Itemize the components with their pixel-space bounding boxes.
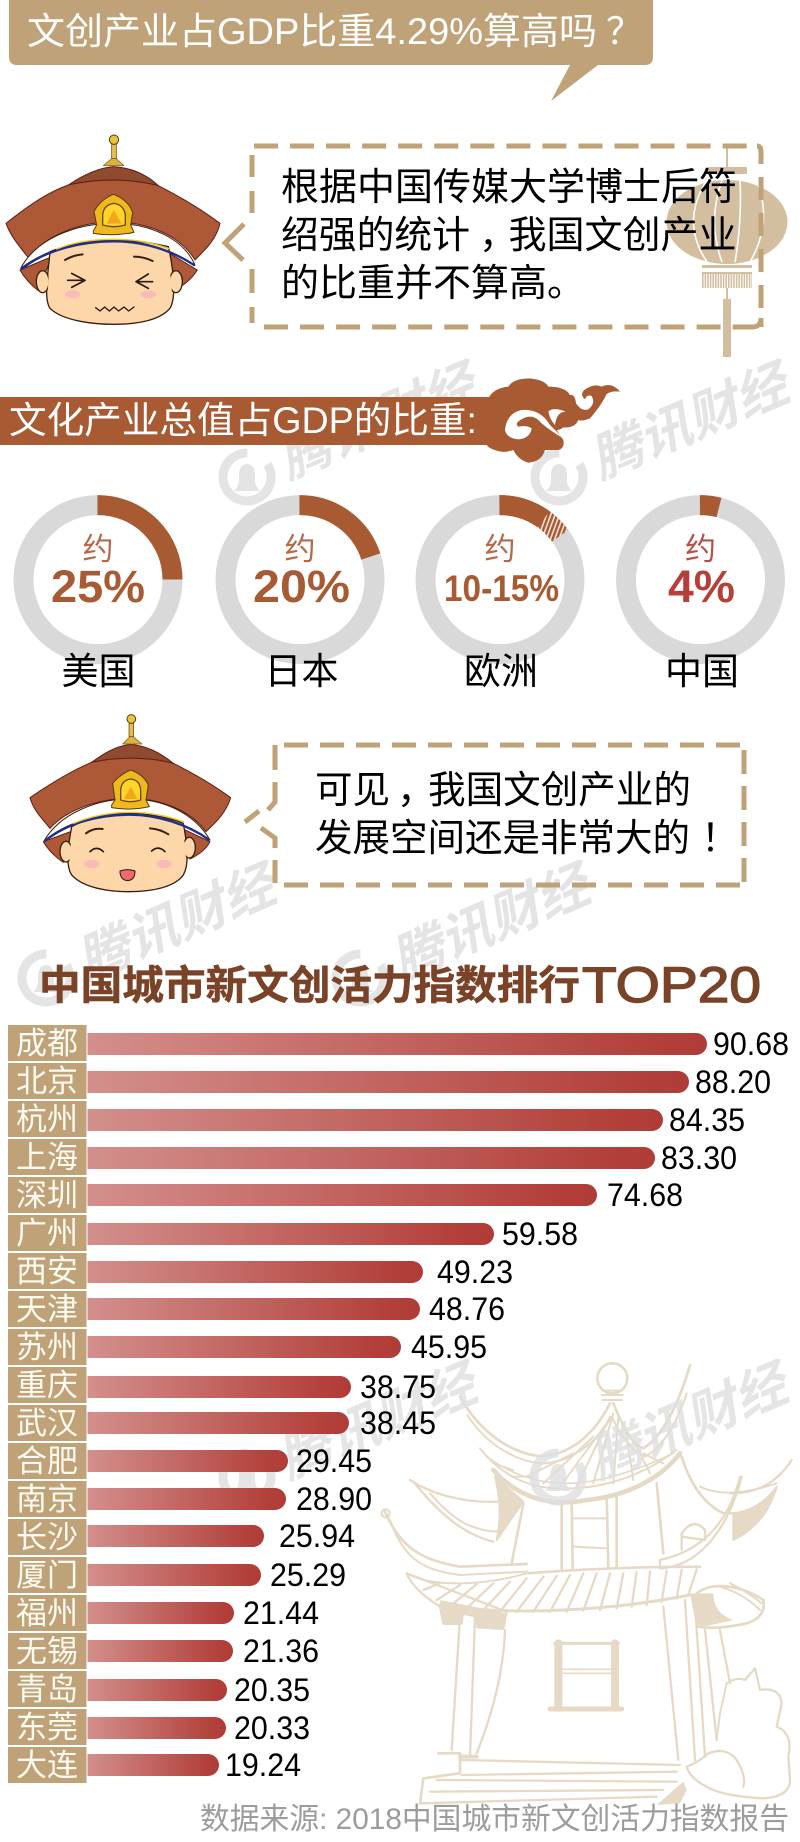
chart title: 中国城市新文创活力指数排行: [39, 964, 580, 1008]
watermarks: third row: 腾讯财经: [581, 1353, 800, 1490]
donut: 美国 25%: 约: [82, 532, 114, 567]
row: 广州: 59.58: [502, 1216, 578, 1252]
row: 福州: 21.44: [243, 1595, 319, 1631]
row: 杭州: 84.35: [669, 1102, 745, 1138]
icon: emperor character, squinting: [6, 135, 220, 324]
watermarks: third row: [214, 1353, 800, 1510]
row: 青岛: 青岛: [16, 1672, 78, 1707]
donut: 日本 20%: 日本: [264, 651, 338, 692]
watermarks: second row: 腾讯财经: [69, 854, 289, 991]
title text: ？: [606, 11, 643, 52]
row: 合肥: [8, 1443, 372, 1479]
conclusion text: ！: [701, 818, 739, 860]
row: 上海: 上海: [16, 1140, 78, 1175]
heading text: 文化产业总值占GDP的比重:: [9, 400, 477, 441]
row: 长沙: [8, 1518, 355, 1555]
row: 苏州: 45.95: [411, 1329, 487, 1365]
conclusion text: ，: [397, 770, 435, 812]
row: 重庆: 38.75: [360, 1369, 436, 1405]
callout text: 的比重并不算高。: [281, 263, 585, 305]
row: 东莞: [8, 1709, 310, 1746]
row: 成都: 成都: [16, 1026, 78, 1061]
row: 武汉: [8, 1405, 436, 1441]
row: 东莞: 东莞: [16, 1710, 78, 1745]
row: 南京: 南京: [16, 1482, 78, 1517]
donut: 欧洲 10-15%: 约: [484, 532, 516, 567]
row: 北京: 北京: [16, 1064, 78, 1099]
row: 大连: 19.24: [225, 1747, 301, 1783]
watermarks: first row: 腾讯财经: [582, 353, 800, 490]
conclusion text: 可见: [315, 770, 390, 812]
row: 广州: [8, 1215, 578, 1252]
row: 苏州: [8, 1329, 487, 1365]
donut: 美国 25%: [24, 505, 172, 692]
row: 东莞: 20.33: [234, 1710, 310, 1746]
conclusion text: 我国文创产业的: [428, 770, 691, 812]
chart title: [39, 957, 761, 1013]
row: 厦门: [8, 1557, 346, 1593]
row: 南京: 28.90: [296, 1481, 372, 1517]
watermarks: third row: 腾讯财经: [270, 1353, 490, 1490]
donut: 中国 4%: 中国: [665, 651, 739, 692]
conclusion text: [315, 770, 739, 860]
icon: lantern: [666, 146, 788, 357]
row: 天津: 天津: [16, 1292, 78, 1327]
row: 天津: [8, 1291, 505, 1327]
callout: dashed box with explanation: [225, 146, 761, 327]
row: 西安: 49.23: [437, 1254, 513, 1290]
row: 无锡: [8, 1633, 319, 1669]
row: 大连: [8, 1747, 301, 1783]
row: 长沙: 长沙: [16, 1520, 78, 1555]
row: 北京: [8, 1063, 771, 1100]
donut: 日本 20%: 20%: [253, 561, 350, 612]
donut: 中国 4%: [626, 505, 775, 692]
chart title: TOP20: [582, 957, 761, 1013]
row: 南京: [8, 1481, 372, 1517]
row: 青岛: 20.35: [234, 1672, 310, 1708]
row: 上海: [8, 1139, 737, 1176]
donut: 中国 4%: 约: [685, 532, 716, 567]
bar chart: top 20 cities: [8, 1025, 789, 1783]
callout text: [281, 167, 737, 305]
section heading band: share of GDP: [0, 378, 620, 463]
watermarks: second row: 腾讯财经: [383, 854, 603, 991]
background illustration: pagoda: [382, 1363, 792, 1805]
icon: auspicious cloud: [470, 378, 620, 463]
dashed frame and pointer: [245, 745, 744, 885]
row: 天津: 48.76: [429, 1291, 505, 1327]
data source note: 数据来源: 2018中国城市新文创活力指数报告: [200, 1803, 789, 1836]
donut: 美国 25%: 25%: [51, 561, 145, 612]
row: 苏州: 苏州: [16, 1330, 78, 1365]
title text: 文创产业占GDP比重4.29%算高吗: [27, 11, 597, 52]
callout text: ，: [479, 215, 517, 257]
row: 西安: [8, 1253, 513, 1290]
dashed frame: [225, 146, 761, 327]
callout text: 我国文创产业: [508, 215, 736, 257]
row: 广州: 广州: [16, 1216, 78, 1251]
callout text: 绍强的统计: [281, 215, 470, 257]
title speech bubble: [9, 0, 653, 101]
row: 杭州: 杭州: [16, 1102, 78, 1137]
callout text: 根据中国传媒大学博士后符: [281, 167, 737, 209]
donut: 日本 20%: [226, 505, 374, 692]
row: 合肥: 合肥: [16, 1444, 78, 1479]
row: 青岛: [8, 1671, 310, 1708]
row: 成都: [8, 1025, 789, 1062]
row: 杭州: [8, 1101, 745, 1138]
row: 大连: 大连: [16, 1748, 78, 1783]
row: 重庆: [8, 1367, 436, 1405]
conclusion text: 发展空间还是非常大的: [315, 818, 690, 860]
watermarks: first row: [214, 353, 800, 510]
row: 厦门: 25.29: [270, 1557, 346, 1593]
row: 深圳: [8, 1177, 683, 1213]
donut: 欧洲 10-15%: 欧洲: [464, 651, 538, 692]
row: 无锡: 无锡: [16, 1634, 78, 1669]
row: 深圳: 74.68: [607, 1177, 683, 1213]
watermarks: first row: 腾讯财经: [270, 353, 490, 490]
donut: 美国 25%: 美国: [62, 651, 136, 692]
row: 厦门: 厦门: [16, 1558, 78, 1593]
donut: 欧洲 10-15%: 10-15%: [444, 568, 559, 609]
row: 上海: 83.30: [661, 1140, 737, 1176]
row: 福州: [8, 1595, 319, 1631]
row: 武汉: 武汉: [16, 1406, 78, 1441]
watermarks: second row: [13, 854, 603, 1011]
callout: conclusion dashed box: [245, 745, 744, 885]
row: 北京: 88.20: [695, 1064, 771, 1100]
row: 西安: 西安: [16, 1254, 78, 1289]
row: 武汉: 38.45: [360, 1405, 436, 1441]
row: 长沙: 25.94: [279, 1518, 355, 1554]
row: 福州: 福州: [16, 1596, 78, 1631]
donut: 中国 4%: 4%: [668, 561, 735, 612]
row: 重庆: 重庆: [16, 1368, 78, 1403]
row: 深圳: 深圳: [16, 1178, 78, 1213]
row: 无锡: 21.36: [243, 1633, 319, 1669]
icon: emperor character, smiling: [30, 715, 231, 892]
row: 合肥: 29.45: [296, 1443, 372, 1479]
row: 成都: 90.68: [713, 1026, 789, 1062]
donut: 日本 20%: 约: [284, 532, 316, 567]
donut: 欧洲 10-15%: [426, 505, 574, 692]
